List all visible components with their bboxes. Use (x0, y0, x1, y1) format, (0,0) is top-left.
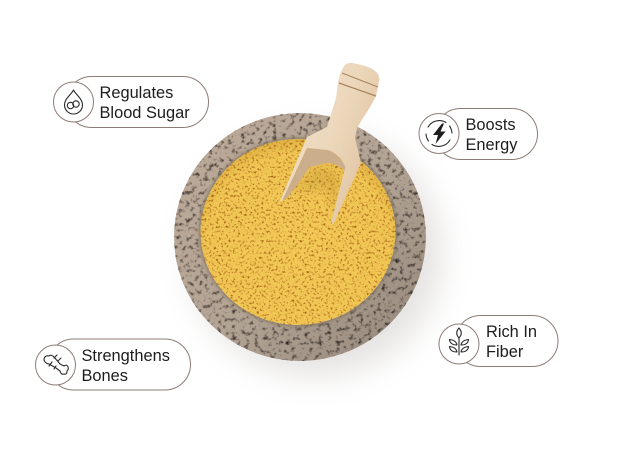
callout: strengthens bones: Bones (82, 367, 128, 385)
bowl shadow (190, 132, 442, 376)
callout: rich in fiber (439, 316, 558, 366)
label: Boosts (466, 116, 516, 134)
callout: strengthens bones (36, 339, 190, 390)
pill (455, 316, 558, 366)
callout: rich in fiber: Fiber (486, 343, 524, 361)
callout: boosts energy (419, 108, 538, 160)
callout: boosts energy: Energy (466, 136, 518, 154)
pill (66, 76, 208, 128)
label: Strengthens (82, 347, 170, 365)
icon: blood drop with sugar cubes (54, 82, 94, 122)
pill (48, 339, 190, 390)
label: Rich In (486, 323, 537, 341)
bowl of millet with wooden scoop (174, 63, 442, 376)
scoop shadow on grain (292, 168, 340, 212)
pill (435, 108, 538, 160)
scoop interior (282, 148, 345, 201)
callout: regulates blood sugar: Blood Sugar (100, 104, 190, 122)
callout: regulates blood sugar (54, 76, 208, 128)
icon: lightning bolt with circular arrows (419, 114, 459, 154)
bowl inner wall (199, 138, 397, 326)
label: Regulates (100, 84, 173, 102)
millet grains (200, 139, 396, 325)
stone bowl (174, 113, 426, 361)
icon: bone (36, 345, 76, 385)
icon: wheat plant (439, 324, 479, 364)
handle grooves (339, 73, 378, 96)
wooden scoop (280, 63, 379, 225)
